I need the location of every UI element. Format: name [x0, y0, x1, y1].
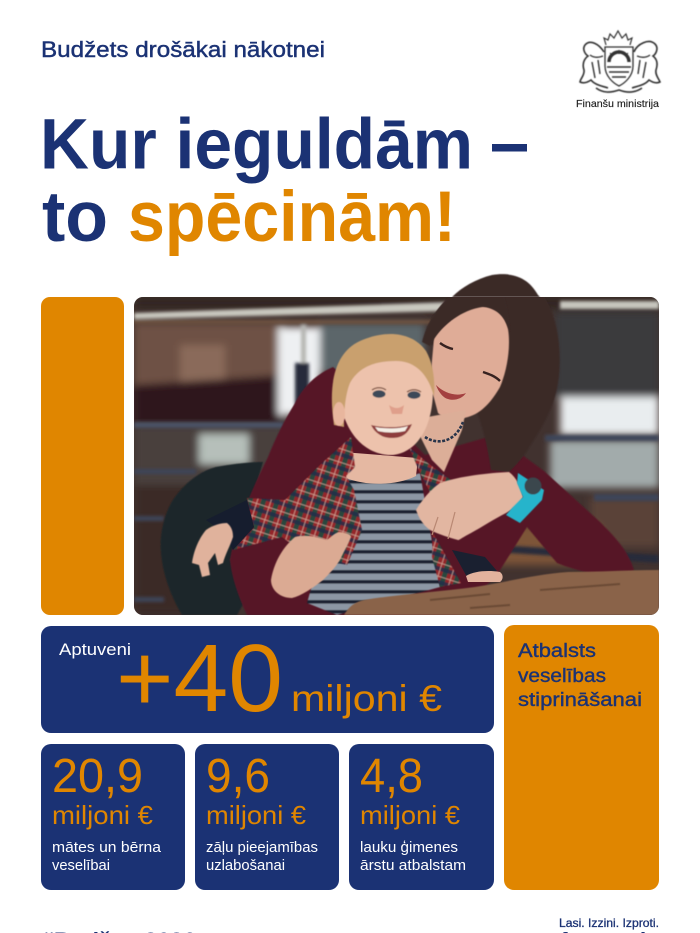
- mother neck and necklace: [420, 410, 466, 472]
- panel: health support: [504, 625, 659, 890]
- mother face: [430, 307, 509, 419]
- panel: total amount: [41, 625, 494, 733]
- child striped shirt: [307, 473, 440, 615]
- chair: [161, 462, 263, 615]
- panel: health support: veselības: [518, 665, 606, 687]
- footer: website: Lasi. Izzini. Izproti.: [559, 916, 659, 930]
- unit: million euro: miljoni €: [291, 678, 442, 719]
- panel: orange side block: [41, 297, 124, 615]
- title: Kur ieguldām: [40, 106, 473, 184]
- label: approximately: Aptuveni: [59, 640, 131, 659]
- panel: rural family doctors: [349, 744, 494, 890]
- watch: [506, 473, 544, 523]
- panel: mother and child health: mātes un bērna: [52, 840, 162, 856]
- mother hair above the photo: [452, 274, 540, 297]
- child cuff: [206, 500, 254, 550]
- child head: [332, 334, 434, 455]
- panel: mother and child health: miljoni €: [52, 800, 154, 830]
- title: [40, 106, 527, 257]
- panel: mother and child health: [41, 744, 185, 890]
- panel: medicine availability: zāļu pieejamības: [206, 840, 318, 856]
- mother lower hand: [271, 532, 351, 598]
- panel: medicine availability: 9,6: [206, 750, 270, 803]
- panel: medicine availability: uzlabošanai: [206, 858, 285, 874]
- panel: medicine availability: miljoni €: [206, 800, 307, 830]
- child left hand: [192, 523, 233, 577]
- child neck: [342, 452, 418, 484]
- title: to: [42, 178, 108, 257]
- heading: campaign line: Budžets drošākai nākotnei: [41, 37, 325, 62]
- panel: mother and child health: 20,9: [52, 750, 143, 803]
- panel: rural family doctors: ārstu atbalstam: [360, 858, 466, 874]
- number: +40: +40: [116, 625, 283, 732]
- panel: mother and child health: veselībai: [52, 858, 110, 874]
- table: [344, 570, 659, 615]
- child right cuff and hand: [452, 550, 497, 577]
- logo: Finanšu ministrija: [576, 31, 660, 110]
- child plaid shirt: [233, 437, 461, 587]
- panel: health support: stiprināšanai: [518, 689, 642, 711]
- panel: health support: Atbalsts: [518, 640, 596, 662]
- panel: rural family doctors: lauku ģimenes: [360, 840, 458, 856]
- title: spēcinām!: [128, 178, 456, 257]
- panel: medicine availability: [195, 744, 339, 890]
- photo: mother and child: [134, 272, 659, 615]
- panel: rural family doctors: 4,8: [360, 750, 423, 803]
- panel: rural family doctors: miljoni €: [360, 800, 461, 830]
- mother hair: [429, 300, 560, 472]
- logo label: Finanšu ministrija: [576, 98, 659, 110]
- mother sweater: [230, 367, 634, 615]
- mother upper hand: [416, 472, 523, 540]
